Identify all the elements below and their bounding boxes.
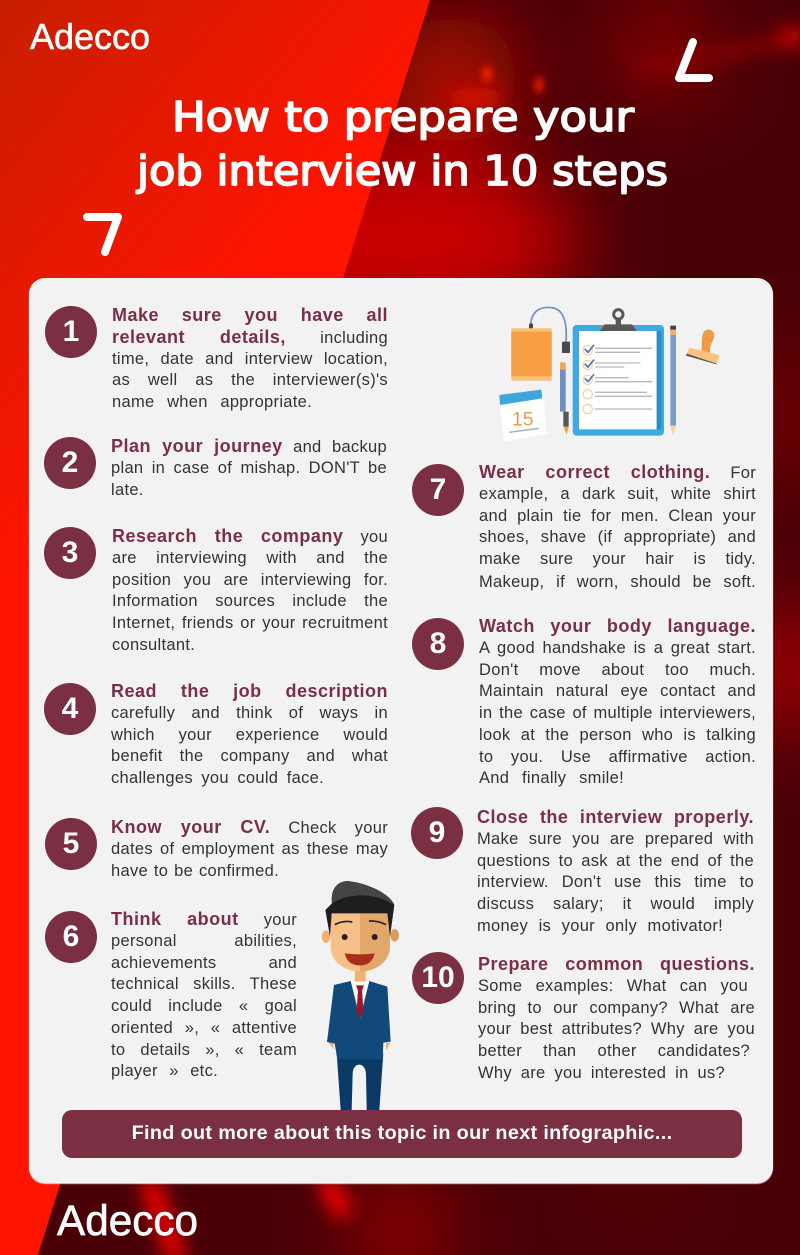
- number badge 6: [45, 911, 97, 963]
- text: step 3: Research the company you: [112, 526, 388, 546]
- icon: decorative corner top right: [675, 38, 713, 82]
- text: step 9: questions to ask at the end of the: [477, 852, 754, 870]
- text: step 2: Plan your journey and backup: [111, 436, 387, 456]
- text: step 3: are interviewing with and the: [112, 549, 388, 567]
- number badge 4: [44, 683, 96, 735]
- icon: calendar: 15: [512, 410, 534, 431]
- text: step 10: bring to our company? What are: [478, 998, 755, 1016]
- text: step 8: Don't move about too much.: [479, 660, 756, 678]
- ears: [322, 930, 330, 943]
- text: step 6: [111, 909, 297, 1080]
- text: step 6: Think about your: [111, 909, 297, 929]
- text: step 6: technical skills. These: [111, 975, 297, 993]
- icon: stamp: [686, 329, 719, 364]
- text: step 10: Prepare common questions.: [478, 954, 755, 974]
- text: step 8: Watch your body language.: [479, 616, 756, 636]
- number badge 2: 2: [62, 446, 78, 479]
- icon: calendar: [499, 390, 547, 441]
- step 9: [411, 807, 754, 935]
- mouth: [345, 953, 375, 965]
- step 3: [44, 526, 388, 654]
- icon: orange folder: [511, 328, 552, 381]
- text: step 9: discuss salary; it would imply: [477, 895, 754, 913]
- number badge 9: 9: [429, 816, 445, 849]
- text: step 6: to details », « team: [111, 1040, 297, 1058]
- tie: [356, 985, 364, 1018]
- text: step 4: carefully and think of ways in: [111, 704, 388, 722]
- number badge 5: [45, 818, 97, 870]
- icon: cable: [529, 307, 570, 353]
- text: step 8: [479, 616, 756, 787]
- call to action banner: Find out more about this topic in our next infographic...: [132, 1122, 672, 1144]
- number badge 7: [412, 464, 464, 516]
- text: step 5: [111, 817, 388, 880]
- number badge 8: 8: [430, 627, 446, 660]
- number badge 5: 5: [63, 827, 79, 860]
- number badge 3: 3: [62, 536, 78, 569]
- logo: Adecco top: Adecco: [30, 16, 150, 57]
- text: step 9: money is your only motivator!: [477, 917, 723, 935]
- text: step 4: benefit the company and what: [111, 747, 388, 765]
- number badge 1: [45, 306, 97, 358]
- text: step 9: interview. Don't use this time to: [477, 873, 754, 891]
- step 4: [44, 681, 388, 787]
- illustration: clipboard and office supplies: [499, 306, 720, 441]
- text: step 5: dates of employment as these may: [111, 840, 388, 858]
- step 8: [412, 616, 756, 787]
- number badge 1: 1: [63, 315, 79, 348]
- icon: pen: [560, 362, 569, 435]
- icon: decorative corner left: [83, 213, 122, 256]
- text: step 6: oriented », « attentive: [111, 1019, 297, 1037]
- text: step 7: make sure your hair is tidy.: [479, 550, 756, 568]
- text: step 3: Internet, friends or your recruitment: [112, 614, 388, 632]
- eyes and brows: [342, 934, 348, 940]
- title: [135, 93, 668, 195]
- text: step 9: Make sure you are prepared with: [477, 830, 754, 848]
- step 6: [45, 909, 297, 1080]
- title: How to prepare your: [172, 93, 634, 141]
- text: step 4: which your experience would: [111, 726, 388, 744]
- illustration: smiling man in a suit: [322, 881, 399, 1110]
- step 2: [44, 436, 387, 498]
- text: step 5: Know your CV. Check your: [111, 817, 388, 837]
- text: step 3: [112, 526, 388, 654]
- number badge 2: [44, 437, 96, 489]
- icon: clipboard: [573, 310, 664, 436]
- step 10: [412, 952, 755, 1082]
- step 5: [45, 817, 388, 880]
- face: [331, 913, 360, 972]
- text: step 9: [477, 807, 754, 935]
- jacket: [327, 981, 391, 1059]
- panel: steps card: [29, 278, 773, 1183]
- number badge 7: 7: [430, 473, 446, 506]
- text: step 2: late.: [111, 480, 144, 498]
- text: step 4: Read the job description: [111, 681, 388, 701]
- number badge 8: [412, 618, 464, 670]
- text: step 3: consultant.: [112, 636, 195, 654]
- step 1: [45, 305, 388, 411]
- text: step 7: shoes, shave (if appropriate) and: [479, 528, 756, 546]
- text: step 10: Why are you interested in us?: [478, 1064, 725, 1082]
- text: step 1: time, date and interview location,: [112, 350, 388, 368]
- text: step 8: Maintain natural eye contact and: [479, 682, 756, 700]
- text: step 2: [111, 436, 387, 498]
- number badge 3: [44, 527, 96, 579]
- text: step 10: [478, 954, 755, 1082]
- text: step 6: player » etc.: [111, 1062, 218, 1080]
- hair: [325, 881, 394, 937]
- text: step 8: in the case of multiple interviewers,: [479, 704, 756, 722]
- legs: [337, 1053, 383, 1110]
- text: step 9: Close the interview properly.: [477, 807, 754, 827]
- call to action banner: [62, 1110, 742, 1158]
- text: step 1: relevant details, including: [112, 327, 388, 347]
- step 7: [412, 462, 756, 591]
- text: step 6: could include « goal: [111, 997, 297, 1015]
- neck: [355, 968, 366, 983]
- icon: pencil: [670, 326, 676, 436]
- text: step 7: [479, 462, 756, 591]
- text: step 7: example, a dark suit, white shirt: [479, 485, 756, 503]
- text: step 7: and plain tie for men. Clean your: [479, 506, 756, 524]
- number badge 10: 10: [421, 961, 455, 994]
- text: step 6: personal abilities,: [111, 932, 297, 950]
- text: step 6: achievements and: [111, 954, 297, 972]
- logo: Adecco bottom: Adecco: [57, 1197, 198, 1245]
- number badge 4: 4: [62, 692, 78, 725]
- text: step 3: position you are interviewing for.: [112, 570, 388, 588]
- text: step 1: Make sure you have all: [112, 305, 388, 325]
- number badge 10: [412, 952, 464, 1004]
- shirt: [351, 982, 370, 1017]
- title: job interview in 10 steps: [136, 147, 668, 195]
- text: step 4: challenges you could face.: [111, 769, 324, 787]
- text: step 10: better than other candidates?: [478, 1042, 750, 1060]
- text: step 1: as well as the interviewer(s)'s: [112, 371, 388, 389]
- text: step 5: have to be confirmed.: [111, 862, 279, 880]
- hands: [328, 1043, 391, 1050]
- text: step 10: Some examples: What can you: [478, 977, 748, 995]
- text: step 10: your best attributes? Why are you: [478, 1020, 755, 1038]
- text: step 8: look at the person who is talking: [479, 726, 756, 744]
- text: step 1: name when appropriate.: [112, 393, 312, 411]
- text: step 7: Wear correct clothing. For: [479, 462, 756, 482]
- text: step 3: Information sources include the: [112, 592, 388, 610]
- number badge 9: [411, 807, 463, 859]
- text: step 2: plan in case of mishap. DON'T be: [111, 459, 387, 477]
- text: step 1: [112, 305, 388, 411]
- text: step 7: Makeup, if worn, should be soft.: [479, 573, 756, 591]
- text: step 8: to you. Use affirmative action.: [479, 748, 756, 766]
- number badge 6: 6: [63, 920, 79, 953]
- text: step 4: [111, 681, 388, 787]
- text: step 8: A good handshake is a great start.: [479, 639, 756, 657]
- text: step 8: And finally smile!: [479, 769, 624, 787]
